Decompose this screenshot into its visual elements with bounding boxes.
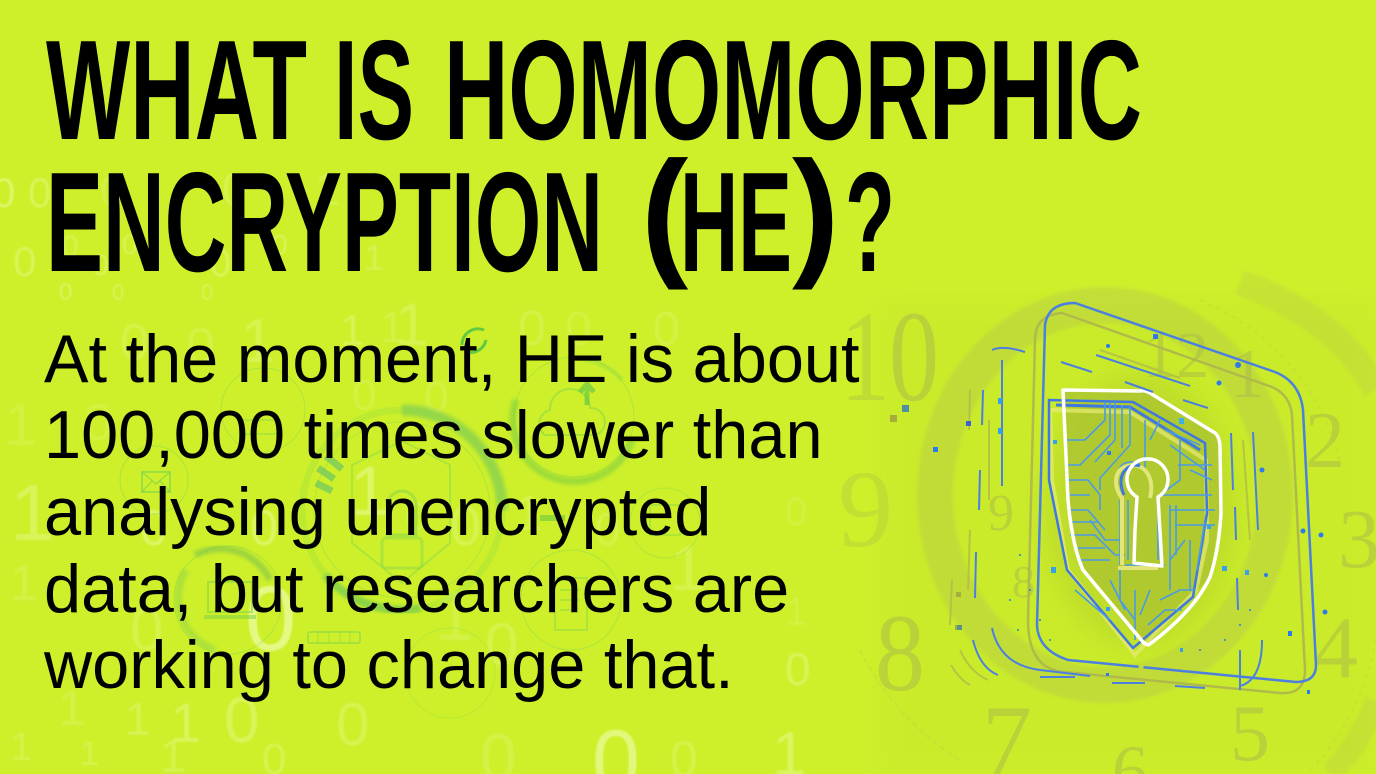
binary digit watermark: 0: [120, 314, 149, 372]
binary digit watermark: 1: [670, 532, 706, 604]
clock numerals: 4: [1314, 600, 1358, 697]
clock numerals: 1: [1230, 336, 1265, 413]
binary digit watermark: 0: [785, 490, 807, 534]
security icon rings: [120, 329, 700, 718]
binary digit watermark: 1: [395, 291, 428, 358]
binary digit watermark: 0: [210, 243, 231, 285]
data ring: [221, 368, 305, 452]
binary digit watermark: 1: [80, 735, 99, 773]
clock numerals: 9: [988, 485, 1014, 542]
binary digit watermark: 1: [240, 307, 274, 376]
binary digit watermark: 0: [130, 596, 163, 663]
white keyhole: [1127, 459, 1168, 566]
olive shield echo: [1050, 410, 1207, 655]
binary digit watermark: 0: [595, 503, 621, 555]
binary digit watermark: 1: [340, 306, 364, 355]
binary digit watermark: 1: [170, 691, 201, 754]
clock numerals: 9: [838, 448, 893, 570]
body text: [43, 321, 860, 703]
binary digit watermark: 1: [364, 237, 384, 278]
title: (: [641, 132, 689, 291]
binary digit watermark: 0: [485, 611, 518, 678]
binary digit watermark: 0: [100, 167, 123, 214]
binary digit watermark: 0: [653, 303, 680, 356]
binary digit watermark: 0: [112, 280, 124, 305]
binary digit watermark: 0: [336, 691, 369, 758]
blue dashes: [973, 348, 1262, 690]
blue shield echo: [1049, 400, 1207, 648]
refresh arrow: [462, 329, 486, 353]
mail ring: [120, 446, 188, 514]
circuit traces: [1067, 402, 1215, 640]
binary digit watermark: 0: [62, 230, 79, 263]
olive dashes: [950, 350, 1250, 685]
binary digit watermark: 0: [84, 394, 113, 452]
binary digit watermark: 0: [424, 373, 448, 422]
title: ): [792, 132, 839, 291]
binary digit watermark: 1: [350, 452, 389, 530]
device ring: [540, 488, 700, 558]
binary digit watermark: 0: [59, 279, 72, 306]
binary digit watermark: 0: [518, 300, 546, 356]
binary digit watermark: 0: [92, 249, 109, 282]
binary digit watermark: 0: [272, 229, 288, 260]
shield body: [1063, 390, 1220, 645]
binary digit watermark: 1: [4, 391, 37, 458]
binary digit watermark: 1: [315, 163, 341, 215]
clock numerals: 8: [1012, 556, 1035, 607]
binary digit watermark: 1: [380, 303, 404, 352]
body text: working to change that.: [43, 627, 734, 703]
clock numerals: [838, 286, 1376, 774]
clock numerals: 12: [1143, 319, 1209, 392]
right side tint: [880, 300, 1376, 774]
binary digit watermark: 0: [352, 371, 376, 420]
central lock ring: [302, 410, 502, 610]
binary digit watermark: 1: [10, 725, 32, 769]
body text: At the moment, HE is about: [44, 321, 860, 397]
soft shadow: [1045, 375, 1235, 645]
title: WHAT: [46, 11, 307, 170]
body text: data, but researchers are: [44, 551, 789, 627]
binary digit watermark: 1: [10, 468, 54, 557]
binary digit watermark: 1: [58, 680, 86, 736]
clock rings: [860, 282, 1376, 774]
title: IS: [334, 11, 414, 170]
clock numerals: 1: [840, 286, 890, 429]
binary digit watermark: 0: [245, 568, 296, 670]
binary digit watermark: 0: [140, 500, 168, 556]
binary digit watermark: 0: [250, 500, 278, 556]
binary digit watermark: 1: [515, 485, 543, 541]
back keyhole echo: [1116, 465, 1151, 565]
cloud upload ring: [513, 357, 634, 481]
binary digit watermark: 0: [565, 303, 592, 356]
password box: [308, 632, 360, 643]
binary digit watermark: 0: [785, 643, 811, 695]
title: ENCRYPTION: [46, 143, 603, 302]
binary digit watermark: 1: [125, 693, 151, 745]
binary digit watermark: 0: [224, 684, 260, 756]
blue frame: [1037, 303, 1316, 682]
binary digit watermark: 0: [450, 494, 481, 557]
binary digit watermark: 0: [186, 318, 215, 376]
clock numerals: 2: [1305, 397, 1345, 485]
binary digit watermark: 0: [122, 229, 138, 260]
document ring: [521, 550, 621, 650]
olive back frame: [1028, 313, 1305, 693]
lower ring: [405, 628, 495, 718]
title: HE: [680, 143, 792, 302]
binary digit watermark: 1: [785, 590, 807, 634]
title: [46, 11, 1142, 302]
binary digit watermark: 1: [435, 577, 474, 655]
white shield outline: [1063, 390, 1221, 645]
clock illustration: [838, 282, 1376, 774]
binary digit watermark: 0: [28, 169, 51, 216]
shield and frame illustration: [890, 303, 1328, 694]
binary digit watermark: 0: [222, 163, 248, 215]
title: ?: [845, 143, 895, 302]
binary digit watermark: 0: [201, 280, 213, 305]
binary digit watermark: 0: [13, 238, 36, 285]
floating data particles: [890, 334, 1328, 694]
binary digit watermark: 1: [10, 555, 38, 611]
binary digit watermark: 0: [405, 495, 427, 539]
binary digit watermark: [0, 163, 811, 774]
body text: 100,000 times slower than: [44, 397, 823, 473]
clock numerals: 0: [889, 286, 939, 429]
clock numerals: 8: [875, 592, 925, 714]
laptop ring: [174, 546, 282, 654]
body text: analysing unencrypted: [44, 474, 711, 550]
